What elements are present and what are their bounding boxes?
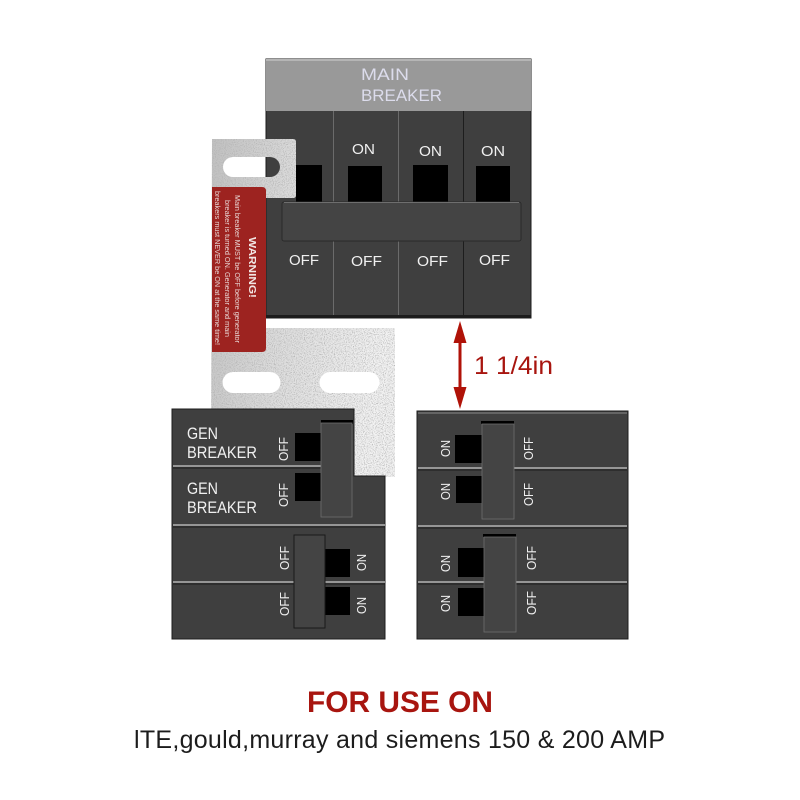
rotated switch labels: ON	[354, 597, 369, 614]
main breaker OFF labels: OFF	[351, 253, 382, 270]
main breaker ON labels: ON	[352, 141, 375, 158]
main breaker OFF labels	[289, 252, 510, 270]
rotated switch labels: OFF	[277, 592, 292, 616]
rotated switch labels: ON	[438, 595, 453, 612]
main breaker OFF labels: OFF	[479, 252, 510, 269]
upper handle	[321, 420, 353, 517]
heading: for use on: FOR USE ON	[307, 686, 493, 719]
rotated switch labels: ON	[438, 483, 453, 500]
warning heading: WARNING!	[246, 237, 257, 298]
main breaker OFF labels: OFF	[289, 252, 319, 269]
gen breaker labels: BREAKER	[187, 443, 257, 462]
panel: breakers (right)	[417, 411, 628, 639]
rotated switch labels: OFF	[276, 437, 291, 461]
main breaker ON labels: ON	[481, 143, 505, 160]
rotated switch labels: OFF	[521, 437, 536, 460]
warning body text	[213, 191, 240, 345]
rotated switch labels: OFF	[524, 591, 539, 615]
arrow: gap dimension	[454, 321, 466, 409]
switch windows	[295, 433, 350, 615]
switch windows	[296, 165, 510, 202]
gen breaker labels: GEN	[187, 479, 218, 498]
panel: main breaker	[266, 59, 531, 318]
rotated switch labels: ON	[354, 554, 369, 571]
main breaker OFF labels: OFF	[417, 253, 448, 270]
warning body text: Main breaker MUST be OFF before generator	[233, 195, 240, 344]
warning label	[212, 187, 266, 352]
rotated switch labels: ON	[438, 440, 453, 457]
rotated switch labels: OFF	[277, 546, 292, 570]
rotated switch labels	[438, 437, 539, 615]
main breaker header: BREAKER	[361, 86, 442, 105]
gen breaker labels: GEN	[187, 424, 218, 443]
compatibility text: lTE,gould,murray and siemens 150 & 200 AMP	[134, 726, 665, 754]
switch windows	[455, 435, 485, 616]
rotated switch labels: OFF	[276, 483, 291, 507]
rotated switch labels: OFF	[521, 483, 536, 506]
gen breaker labels: BREAKER	[187, 498, 257, 517]
lower handle	[294, 535, 325, 628]
panel: generator breakers (left)	[172, 409, 385, 639]
warning body text: breakers must NEVER be ON at the same time!	[213, 191, 220, 345]
main breaker ON labels	[352, 141, 505, 160]
main breaker header: MAIN	[361, 65, 409, 84]
lower handle	[483, 534, 516, 632]
upper handle	[481, 421, 514, 519]
gen breaker labels	[187, 424, 257, 517]
rotated switch labels	[276, 437, 369, 616]
warning body text: breaker is turned ON. Generator and main	[223, 200, 230, 337]
main breaker handle	[282, 202, 521, 241]
main breaker ON labels: ON	[419, 143, 442, 160]
dimension label: 1 1/4in	[474, 352, 553, 380]
main breaker header	[266, 59, 531, 111]
rotated switch labels: ON	[438, 555, 453, 572]
metal interlock bracket	[211, 139, 395, 477]
rotated switch labels: OFF	[524, 546, 539, 570]
